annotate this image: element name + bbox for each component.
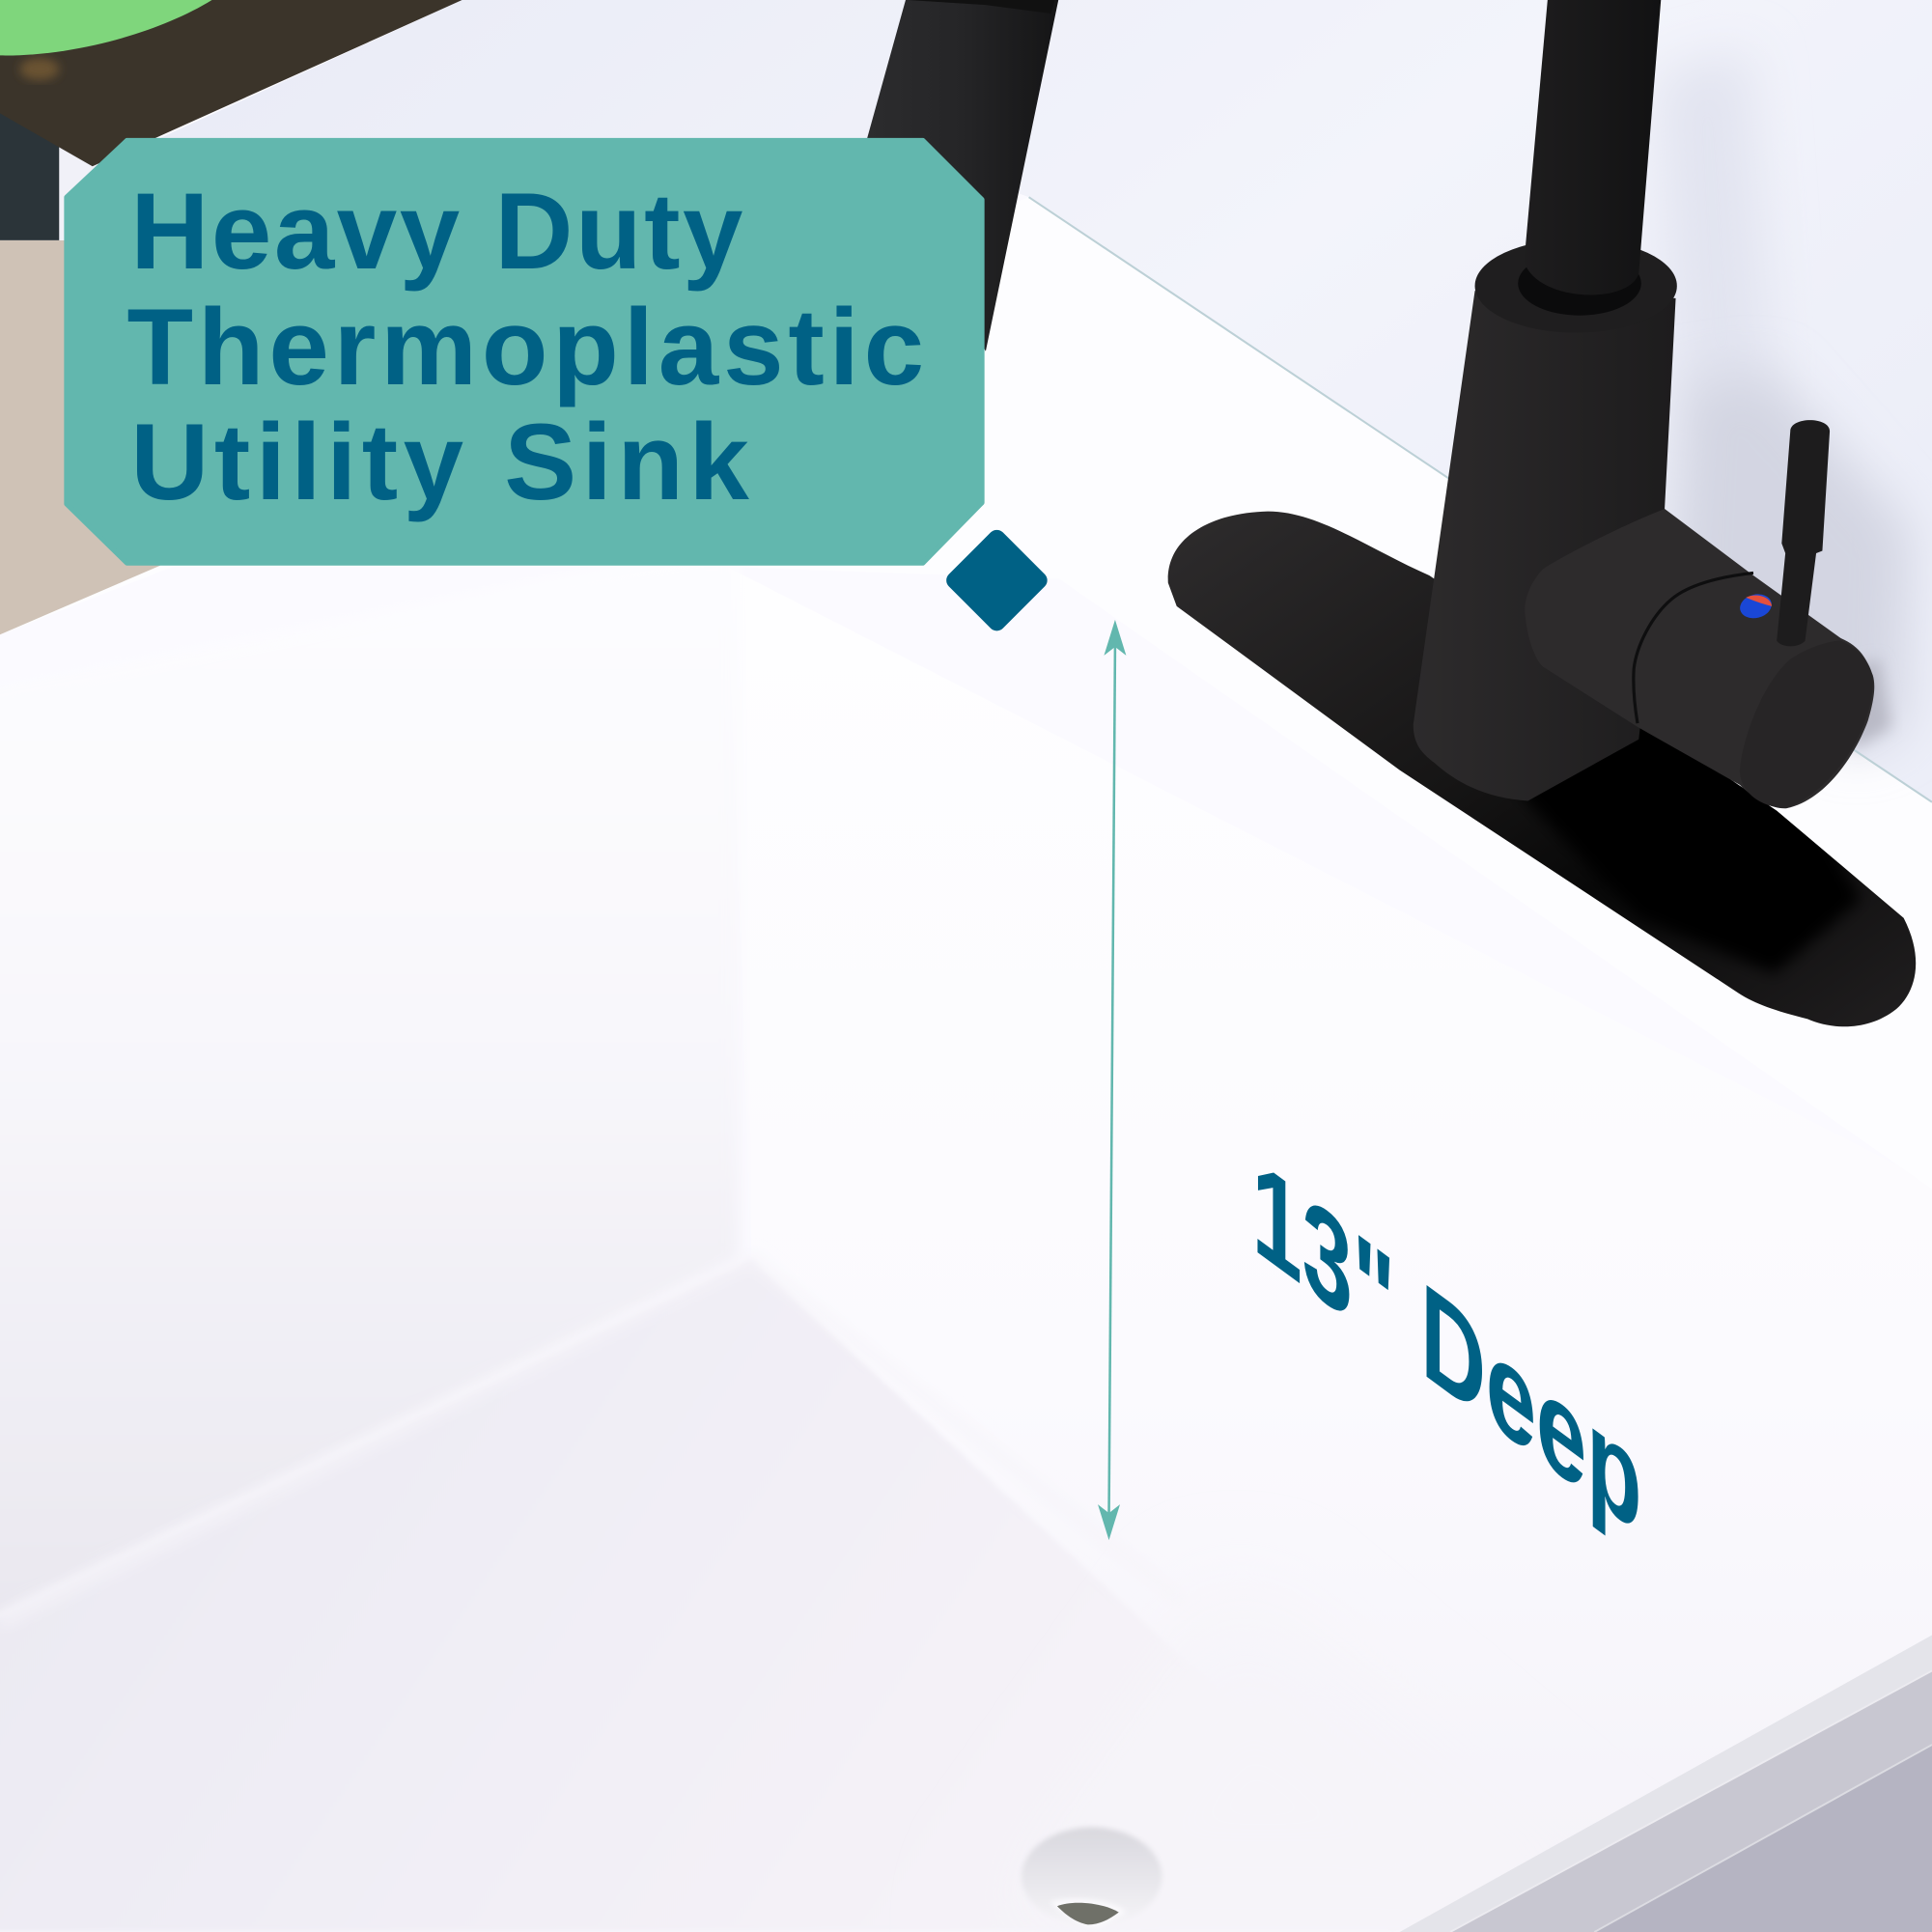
front rim and outer sink face — [1400, 1635, 1932, 1932]
faucet spout head — [866, 0, 1058, 351]
title text: Thermoplastic — [126, 286, 924, 407]
title text: Heavy Duty — [130, 170, 743, 292]
title panel — [67, 140, 982, 563]
faucet mixer handle — [1525, 509, 1874, 808]
deck plate — [1168, 512, 1916, 1026]
icon: diamond marker — [942, 526, 1050, 634]
faucet stem — [1525, 0, 1661, 295]
wooden shelf — [0, 0, 462, 166]
hot and cold indicator — [1737, 591, 1775, 622]
carpet and dark object at left edge — [0, 108, 160, 634]
arrow: double-headed depth arrow — [1098, 620, 1126, 1540]
title text: Utility Sink — [130, 401, 749, 522]
depth label: 13" Deep — [1252, 1130, 1641, 1564]
faucet lever — [1777, 420, 1830, 646]
back rim of the sink — [0, 197, 1932, 1189]
back wall — [160, 0, 1932, 802]
green container — [0, 0, 211, 55]
drain hole — [1022, 1828, 1162, 1928]
faucet body — [1414, 239, 1677, 800]
